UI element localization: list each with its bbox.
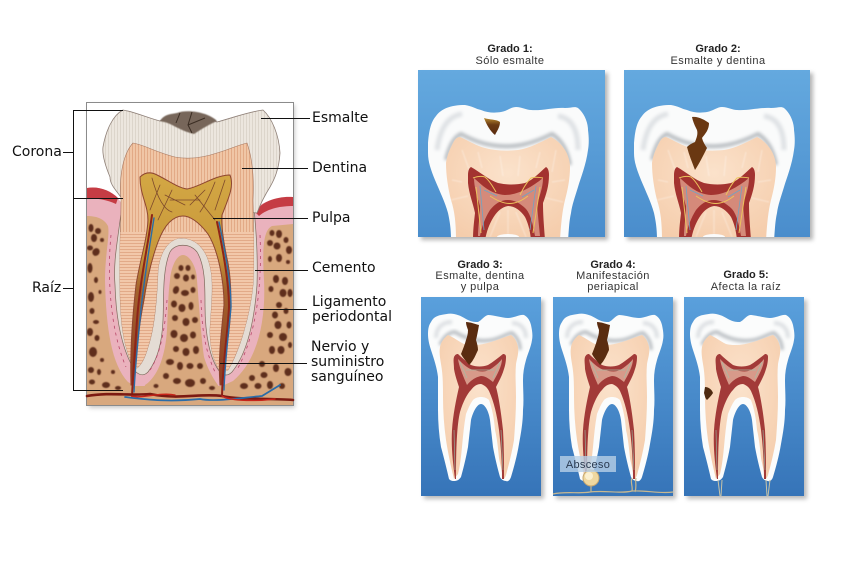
abscess label bbox=[560, 456, 616, 472]
heading: grado 4: Grado 4: bbox=[590, 259, 636, 271]
bone tissue bbox=[87, 212, 293, 405]
abscess bbox=[583, 470, 599, 486]
heading: grado 2 bbox=[670, 43, 766, 67]
tooth bbox=[428, 314, 532, 481]
dentin bbox=[120, 143, 254, 371]
heading: grado 4: periapical bbox=[587, 281, 639, 293]
cementum bbox=[115, 205, 257, 375]
nerve lines bbox=[553, 478, 673, 494]
tooth crown bbox=[634, 105, 795, 240]
cavity bbox=[704, 387, 713, 400]
labels: tooth parts bbox=[12, 110, 392, 385]
tooth crown bbox=[428, 105, 589, 240]
pulp bbox=[131, 173, 232, 385]
label: Ligamento periodontal bbox=[312, 294, 392, 325]
abscess label: Absceso bbox=[566, 459, 610, 471]
cavity bbox=[484, 118, 500, 135]
label: Dentina: Dentina bbox=[312, 160, 367, 176]
label: Pulpa: Pulpa bbox=[312, 210, 350, 226]
tooth bbox=[690, 314, 794, 481]
label: Esmalte: Esmalte bbox=[312, 110, 368, 126]
ligament fibres bbox=[109, 235, 260, 372]
label: Nervio y suministro sanguíneo bbox=[311, 339, 384, 385]
panel: tooth anatomy diagram bbox=[86, 102, 295, 408]
panel: grado 3 bbox=[421, 259, 544, 499]
cavity bbox=[461, 322, 479, 365]
label: Cemento: Cemento bbox=[312, 260, 376, 276]
heading: grado 2: Grado 2: bbox=[695, 43, 741, 55]
cavity bbox=[592, 322, 610, 365]
crown fissure bbox=[160, 111, 217, 134]
nerve ends bbox=[718, 480, 770, 496]
heading: grado 1: Sólo esmalte bbox=[476, 55, 544, 67]
panel: grado 1 bbox=[418, 43, 608, 240]
label: Nervio y suministro sanguíneo: suministro bbox=[311, 354, 384, 370]
heading: grado 1: Grado 1: bbox=[487, 43, 533, 55]
heading: grado 5: Afecta la raíz bbox=[711, 281, 781, 293]
heading: grado 3: Esmalte, dentina bbox=[435, 270, 525, 282]
panel: grado 5 bbox=[684, 269, 807, 499]
panel: grado 4 bbox=[553, 259, 676, 499]
panel: grado 2 bbox=[624, 43, 813, 240]
gum crests bbox=[87, 187, 293, 216]
cavity bbox=[687, 117, 709, 170]
label: Raíz: Raíz bbox=[32, 280, 61, 296]
bone spots bbox=[87, 224, 292, 390]
heading: grado 5 bbox=[711, 269, 781, 293]
label: Nervio y suministro sanguíneo: Nervio y bbox=[311, 339, 369, 355]
heading: grado 3 bbox=[435, 259, 525, 293]
heading: grado 3: y pulpa bbox=[461, 281, 500, 293]
label: Corona: Corona bbox=[12, 144, 62, 160]
nerves and blood vessels bbox=[87, 178, 293, 400]
central bone bbox=[144, 255, 218, 386]
heading: grado 4 bbox=[576, 259, 650, 293]
enamel bbox=[103, 110, 280, 213]
diagram frame bbox=[86, 102, 294, 406]
tooth bbox=[559, 314, 663, 481]
leader lines bbox=[63, 110, 310, 390]
label: Ligamento periodontal: periodontal bbox=[312, 309, 392, 325]
heading: grado 3: Grado 3: bbox=[457, 259, 503, 271]
heading: grado 1 bbox=[476, 43, 544, 67]
heading: grado 4: Manifestación bbox=[576, 270, 650, 282]
heading: grado 5: Grado 5: bbox=[723, 269, 769, 281]
heading: grado 2: Esmalte y dentina bbox=[670, 55, 766, 67]
label: Ligamento periodontal: Ligamento bbox=[312, 294, 386, 310]
label: Nervio y suministro sanguíneo: sanguíneo bbox=[311, 369, 383, 385]
gum and periodontal ligament bbox=[87, 187, 293, 386]
